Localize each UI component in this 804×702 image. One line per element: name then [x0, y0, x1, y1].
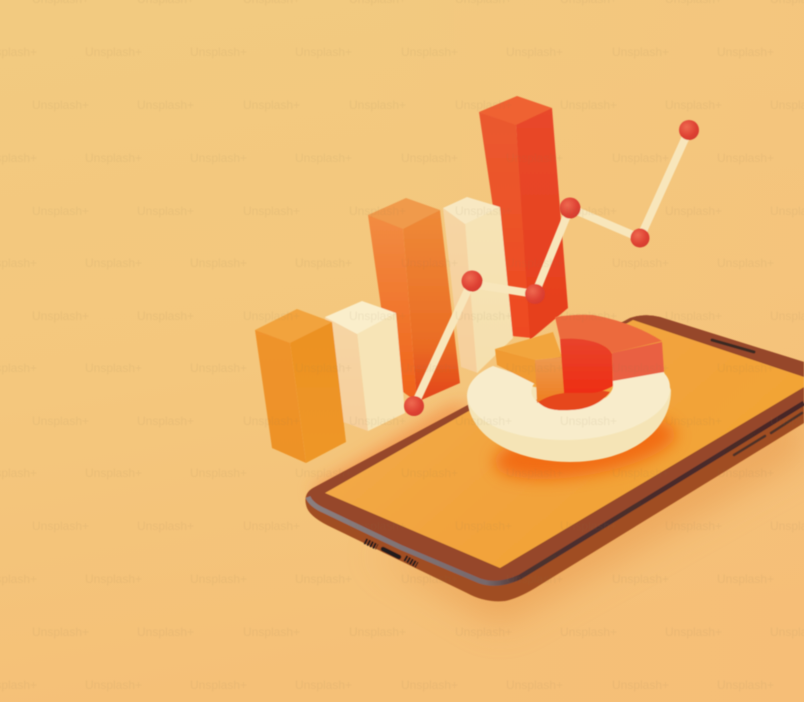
watermark grid: Unsplash+ — [455, 519, 512, 533]
watermark grid: Unsplash+ — [85, 678, 142, 692]
watermark grid: Unsplash+ — [717, 572, 774, 586]
watermark grid: Unsplash+ — [560, 625, 617, 639]
line segments — [414, 130, 689, 406]
charging port and grilles — [365, 541, 417, 565]
watermark grid: Unsplash+ — [190, 678, 247, 692]
watermark grid: Unsplash+ — [401, 361, 458, 375]
watermark grid: Unsplash+ — [401, 678, 458, 692]
watermark grid: Unsplash+ — [401, 256, 458, 270]
watermark grid: Unsplash+ — [506, 361, 563, 375]
watermark grid: Unsplash+ — [665, 519, 722, 533]
watermark grid: Unsplash+ — [295, 151, 352, 165]
watermark grid: Unsplash+ — [295, 466, 352, 480]
watermark grid: Unsplash+ — [560, 204, 617, 218]
watermark grid: Unsplash+ — [85, 361, 142, 375]
phone cast shadow — [370, 400, 804, 625]
watermark grid: Unsplash+ — [612, 572, 669, 586]
watermark grid: Unsplash+ — [243, 519, 300, 533]
watermark grid: Unsplash+ — [295, 361, 352, 375]
watermark grid: Unsplash+ — [85, 45, 142, 59]
watermark grid: Unsplash+ — [612, 466, 669, 480]
watermark grid: Unsplash+ — [190, 361, 247, 375]
watermark grid: Unsplash+ — [401, 466, 458, 480]
watermark grid: Unsplash+ — [560, 98, 617, 112]
phone metal edge — [308, 403, 804, 583]
watermark grid: Unsplash+ — [717, 151, 774, 165]
watermark grid: Unsplash+ — [665, 98, 722, 112]
watermark grid: Unsplash+ — [190, 151, 247, 165]
phone screen — [325, 320, 804, 568]
watermark grid: Unsplash+ — [401, 572, 458, 586]
watermark grid: Unsplash+ — [717, 45, 774, 59]
watermark grid: Unsplash+ — [32, 309, 89, 323]
watermark grid: Unsplash+ — [665, 625, 722, 639]
donut glow on screen — [490, 405, 680, 491]
watermark grid: Unsplash+ — [506, 572, 563, 586]
bar 5: tall red — [479, 96, 568, 340]
bar 4: cream — [443, 197, 513, 373]
watermark grid: Unsplash+ — [137, 204, 194, 218]
side buttons — [734, 413, 802, 455]
watermark grid: Unsplash+ — [560, 519, 617, 533]
pie: cream ring side — [467, 372, 671, 462]
watermark grid: Unsplash+ — [32, 625, 89, 639]
pie chart — [467, 315, 671, 462]
watermark grid: Unsplash+ — [506, 45, 563, 59]
watermark grid: Unsplash+ — [85, 256, 142, 270]
watermark grid: Unsplash+ — [717, 256, 774, 270]
watermark grid: Unsplash+ — [349, 204, 406, 218]
smartphone — [305, 315, 804, 601]
watermark grid: Unsplash+ — [349, 309, 406, 323]
watermark grid: Unsplash+ — [401, 151, 458, 165]
watermark grid: Unsplash+ — [295, 45, 352, 59]
orange glow around phone edge — [310, 405, 480, 505]
phone bezel — [307, 315, 804, 583]
watermark grid: Unsplash+ — [506, 466, 563, 480]
watermark grid: Unsplash+ — [349, 98, 406, 112]
watermark grid: Unsplash+ — [32, 414, 89, 428]
watermark grid: Unsplash+ — [243, 625, 300, 639]
watermark grid: Unsplash+ — [243, 204, 300, 218]
watermark grid: Unsplash+ — [243, 98, 300, 112]
watermark grid: Unsplash+ — [506, 151, 563, 165]
watermark grid: Unsplash+ — [506, 678, 563, 692]
watermark grid: Unsplash+ — [137, 309, 194, 323]
watermark grid: Unsplash+ — [717, 678, 774, 692]
bar 2: cream — [325, 301, 405, 431]
watermark grid: Unsplash+ — [455, 625, 512, 639]
pie: hole floor — [536, 390, 610, 410]
watermark grid: Unsplash+ — [32, 519, 89, 533]
watermark grid: Unsplash+ — [295, 256, 352, 270]
watermark grid: Unsplash+ — [85, 572, 142, 586]
pie: orange sector — [495, 332, 564, 403]
bar 3: orange — [368, 198, 460, 402]
watermark grid: Unsplash+ — [349, 625, 406, 639]
watermark grid: Unsplash+ — [612, 45, 669, 59]
watermark grid: Unsplash+ — [349, 414, 406, 428]
watermark grid: Unsplash+ — [137, 519, 194, 533]
watermark grid: Unsplash+ — [455, 98, 512, 112]
watermark grid: Unsplash+ — [85, 466, 142, 480]
watermark grid: Unsplash+ — [665, 309, 722, 323]
watermark grid: Unsplash+ — [137, 98, 194, 112]
watermark grid: Unsplash+ — [455, 309, 512, 323]
watermark grid: Unsplash+ — [243, 309, 300, 323]
watermark grid: Unsplash+ — [560, 414, 617, 428]
bar chart — [255, 96, 568, 463]
bar 1: orange — [255, 309, 346, 463]
speaker — [712, 340, 754, 352]
watermark grid: Unsplash+ — [612, 361, 669, 375]
line chart — [404, 120, 699, 416]
phone body — [305, 315, 804, 601]
watermark grid: Unsplash+ — [295, 678, 352, 692]
watermark grid: Unsplash+ — [190, 572, 247, 586]
watermark grid: Unsplash+ — [32, 204, 89, 218]
watermark grid: Unsplash+ — [137, 414, 194, 428]
watermark grid: Unsplash+ — [190, 45, 247, 59]
watermark grid: Unsplash+ — [190, 466, 247, 480]
watermark grid: Unsplash+ — [612, 151, 669, 165]
watermark grid: Unsplash+ — [717, 466, 774, 480]
watermark grid: Unsplash+ — [560, 309, 617, 323]
data points — [404, 120, 699, 416]
pie: red sector — [555, 315, 664, 393]
watermark grid: Unsplash+ — [612, 256, 669, 270]
watermark grid: Unsplash+ — [455, 204, 512, 218]
watermark grid: Unsplash+ — [665, 414, 722, 428]
watermark grid: Unsplash+ — [506, 256, 563, 270]
watermark grid: Unsplash+ — [455, 414, 512, 428]
watermark grid: Unsplash+ — [612, 678, 669, 692]
pie: cream ring top — [467, 366, 670, 440]
watermark grid: Unsplash+ — [32, 98, 89, 112]
watermark grid: Unsplash+ — [243, 414, 300, 428]
watermark grid: Unsplash+ — [295, 572, 352, 586]
watermark grid: Unsplash+ — [665, 204, 722, 218]
watermark grid: Unsplash+ — [190, 256, 247, 270]
watermark grid: Unsplash+ — [85, 151, 142, 165]
watermark grid: Unsplash+ — [349, 519, 406, 533]
watermark grid: Unsplash+ — [401, 45, 458, 59]
watermark grid: Unsplash+ — [137, 625, 194, 639]
watermark grid: Unsplash+ — [717, 361, 774, 375]
